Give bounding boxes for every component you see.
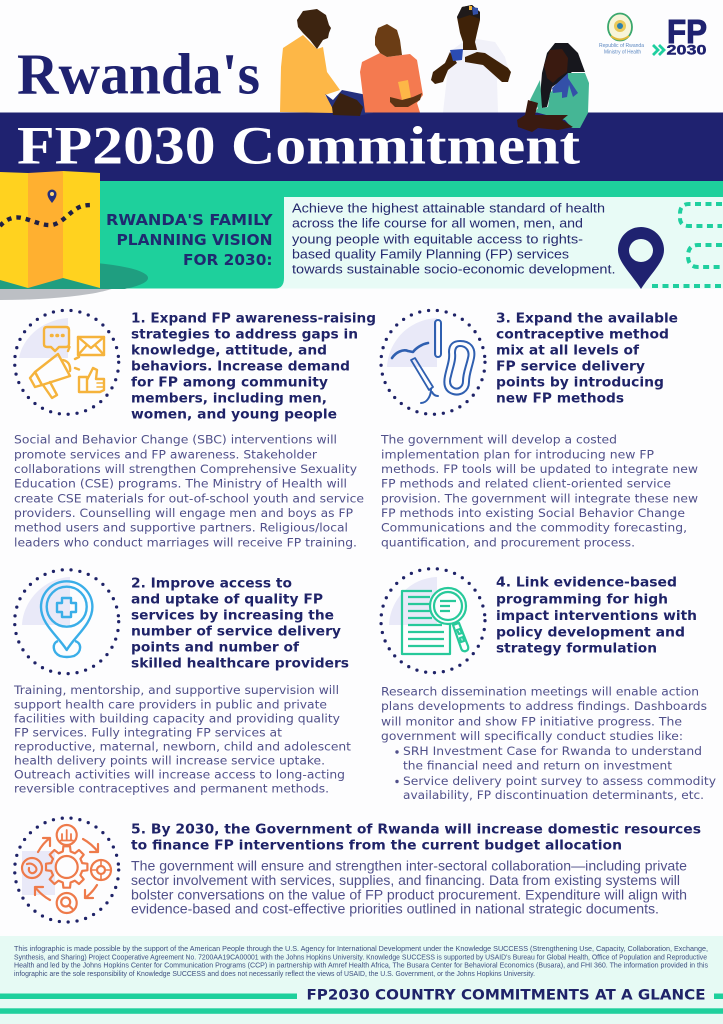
body text 5: The government will ensure and strengthen inter-sectoral collaboration—including private: [131, 858, 687, 874]
heading 2: 2. Improve access to: [131, 576, 292, 591]
body text 3: Communications and the commodity forecasting,: [381, 521, 687, 535]
heading 1: for FP among community: [131, 375, 329, 390]
body text 4: government will specifically conduct studies like:: [381, 729, 683, 743]
vision text panel: [276, 197, 723, 288]
body text 5: evidence-based and cost-effective priorities outlined in national strategic documents.: [131, 900, 659, 916]
title: FP2030 Commitment: FP2030 Commitment: [17, 116, 580, 176]
title: Rwanda's: Rwanda's: [17, 42, 260, 106]
decorative dashed route: [652, 204, 722, 286]
heading 1: knowledge, attitude, and: [131, 343, 327, 358]
vision statement: across the life course for all women, men, and: [292, 216, 583, 231]
heading 2: services by increasing the: [131, 608, 334, 623]
body text 3: FP methods and related client-oriented service: [381, 477, 671, 491]
heading 1: members, including men,: [131, 391, 327, 406]
person in orange shirt: [360, 24, 423, 112]
heading 2: points and number of: [131, 640, 299, 655]
heading 1: 1. Expand FP awareness-raising: [131, 311, 376, 326]
body text 3: The government will develop a costed: [380, 433, 617, 447]
illustration: four people: [280, 5, 589, 132]
icon 1: communication and megaphone: [15, 310, 119, 414]
body text 3: provision. The government will integrate these new: [381, 491, 698, 505]
body text 1: Social and Behavior Change (SBC) interventions will: [14, 433, 337, 447]
body text 4: the financial need and return on investment: [403, 759, 672, 773]
icon 3: contraceptive methods: [381, 310, 485, 414]
body text 1: create CSE materials for out-of-school youth and service: [14, 491, 364, 505]
logo: Rwanda Ministry of Health: [599, 14, 644, 56]
vision statement: [292, 201, 616, 276]
body text 2: FP services. Fully integrating FP services at: [14, 726, 282, 740]
vision statement: based quality Family Planning (FP) services: [292, 246, 570, 261]
header band: [0, 112, 723, 181]
heading 4: impact interventions with: [496, 609, 697, 624]
body text 4: will monitor and show FP initiative progress. The: [381, 714, 682, 728]
body text 1: Education (CSE) programs. The Ministry of Health will: [14, 477, 347, 491]
heading 4: programming for high: [496, 592, 668, 607]
vision statement: young people with equitable access to rights-: [292, 231, 583, 246]
heading 1: [131, 311, 376, 422]
body text 4: SRH Investment Case for Rwanda to understand: [403, 744, 702, 758]
vision heading: PLANNING VISION: [116, 231, 272, 249]
heading 1: women, and young people: [131, 407, 337, 422]
body text 2: [13, 683, 351, 796]
icon 5: financing cycle with gear: [15, 818, 119, 922]
heading 4: [496, 576, 697, 657]
body text 5: sector involvement with services, supplies, and financing. Data from existing systems will: [131, 872, 680, 888]
heading 2: number of service delivery: [131, 624, 342, 639]
body text 1: leaders who conduct marriages will receive FP training.: [14, 535, 357, 549]
person in yellow shirt: [280, 9, 373, 116]
body text 2: Training, mentorship, and supportive supervision will: [13, 683, 339, 697]
heading 3: 3. Expand the available: [496, 311, 678, 326]
heading 3: mix at all levels of: [496, 343, 639, 358]
logo: Rwanda Ministry of Health: Ministry of Health: [604, 50, 641, 56]
body text 5: [131, 858, 687, 916]
body text 1: method users and supportive partners. Religious/local: [14, 521, 348, 535]
heading 2: [131, 576, 349, 671]
body text 2: reversible contraceptives and permanent methods.: [14, 782, 329, 796]
heading 4: strategy formulation: [496, 642, 657, 657]
vision statement: towards sustainable socio-economic development.: [292, 261, 616, 276]
footer heading: FP2030 COUNTRY COMMITMENTS AT A GLANCE: [306, 988, 706, 1004]
heading 3: new FP methods: [496, 391, 624, 406]
vision heading: FOR 2030:: [183, 251, 272, 269]
footer panel: [0, 936, 723, 1024]
body text 1: [14, 433, 364, 549]
heading 4: 4. Link evidence-based: [496, 576, 677, 591]
icon: large location pin: [618, 227, 664, 289]
vision heading: RWANDA'S FAMILY: [106, 211, 273, 229]
body text 4: Research dissemination meetings will enable action: [381, 684, 699, 698]
footer bars: [0, 994, 723, 1014]
logo: FP2030: FP: [667, 13, 707, 50]
body text 2: Outreach activities will increase access to long-acting: [14, 768, 345, 782]
icon 2: healthcare location pin: [15, 570, 119, 674]
vision statement: Achieve the highest attainable standard of health: [292, 201, 605, 216]
heading 5: to finance FP interventions from the current budget allocation: [131, 838, 622, 853]
body text 2: reproductive, maternal, newborn, child and adolescent: [14, 740, 351, 754]
body text 2: support health care providers in public and private: [14, 698, 327, 712]
person in green shirt: [517, 43, 589, 132]
heading 3: points by introducing: [496, 375, 664, 390]
footer disclaimer: [14, 944, 708, 978]
body text 4: Service delivery point survey to assess commodity: [403, 774, 716, 788]
heading 3: [496, 311, 678, 406]
body text 1: providers. Counselling will engage men and boys as FP: [14, 506, 353, 520]
vision banner background: [0, 181, 723, 288]
footer disclaimer: infographic are the sole responsibility of Knowledge SUCCESS and does not necessarily reflect the views of USAID, the U.S. Government, or the Johns Hopkins University.: [14, 969, 535, 978]
heading 1: strategies to address gaps in: [131, 327, 358, 342]
icon: map: [0, 171, 148, 300]
heading 2: skilled healthcare providers: [131, 656, 349, 671]
body text 3: FP methods into existing Social Behavior Change: [381, 506, 685, 520]
body text 4: [381, 684, 716, 802]
logo: FP2030: 2030: [666, 42, 707, 58]
logo: Rwanda Ministry of Health: Republic of Rwanda: [599, 43, 644, 49]
body text 2: health delivery points will increase service uptake.: [14, 754, 325, 768]
body text 3: implementation plan for introducing new FP: [381, 447, 654, 461]
heading 3: FP service delivery: [496, 359, 646, 374]
vision heading: [106, 211, 273, 269]
body text 1: collaborations will strengthen Comprehensive Sexuality: [14, 462, 357, 476]
body text 3: quantification, and procurement process.: [381, 535, 635, 549]
heading 1: behaviors. Increase demand: [131, 359, 350, 374]
body text 4: plans developments to address findings. Dashboards: [381, 699, 707, 713]
body text 1: promote services and FP awareness. Stakeholder: [14, 447, 317, 461]
heading 2: and uptake of quality FP: [131, 592, 323, 607]
body text 2: facilities with building capacity and providing quality: [14, 712, 340, 726]
body text 4: availability, FP discontinuation determinants, etc.: [403, 788, 704, 802]
heading 3: contraceptive method: [496, 327, 669, 342]
heading 5: 5. By 2030, the Government of Rwanda will increase domestic resources: [131, 822, 701, 837]
heading 5: [131, 822, 701, 853]
logo: FP2030: [653, 13, 707, 58]
body text 3: methods. FP tools will be updated to integrate new: [381, 462, 698, 476]
heading 4: policy development and: [496, 625, 685, 640]
icon 4: document with magnifier: [381, 569, 485, 673]
person in white shirt holding phone: [431, 5, 511, 112]
body text 5: bolster conversations on the value of FP product procurement. Expenditure will align with: [131, 886, 687, 902]
body text 3: [380, 433, 698, 549]
